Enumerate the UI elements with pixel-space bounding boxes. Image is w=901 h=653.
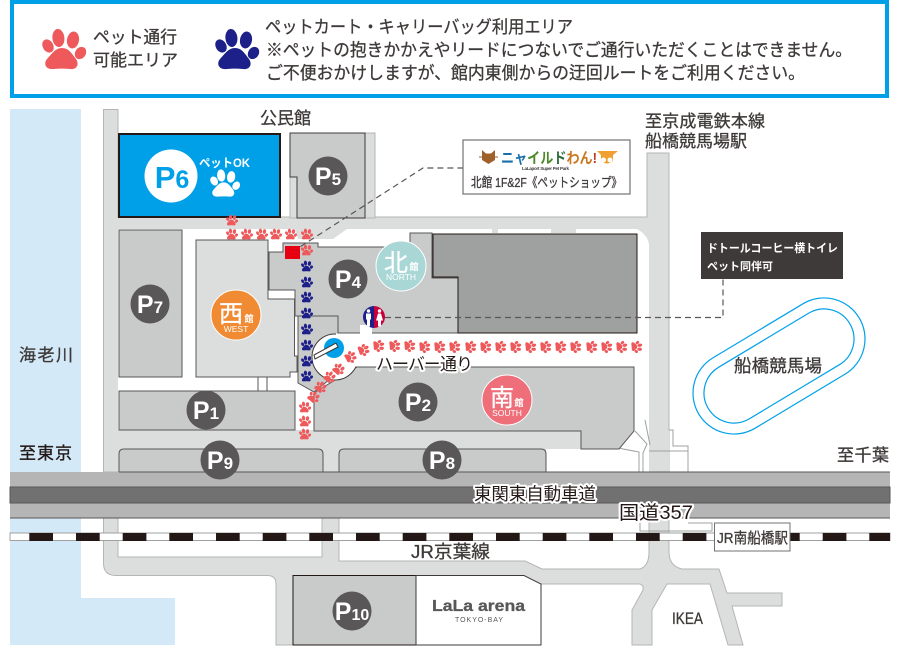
label: community hall: 公民館 — [260, 109, 311, 128]
label: Keisei line — [645, 112, 765, 151]
icon: dog logo — [597, 151, 618, 164]
callout: pet shop — [463, 140, 630, 194]
badge: P4 — [328, 260, 368, 298]
callout second line: ペット同伴可 — [707, 259, 773, 273]
roundabout and harbor street — [312, 325, 649, 380]
label: race course: 船橋競馬場 — [734, 356, 822, 376]
legend panel — [12, 2, 887, 96]
building: lower west block — [298, 316, 338, 392]
building: P8 — [339, 449, 546, 472]
badge: north: 北 — [384, 250, 408, 277]
P6 pet OK mark: ペットOK — [199, 156, 250, 170]
building: P9 — [119, 449, 323, 472]
map base — [10, 109, 782, 645]
badge: P10 — [332, 592, 372, 630]
shop location: 北館 1F&2F《ペットショップ》 — [471, 175, 622, 190]
badge: P8 — [422, 440, 462, 480]
building: dark block — [433, 234, 637, 333]
label: expressway: 東関東自動車道 — [474, 484, 596, 504]
water: river — [10, 109, 175, 645]
road stub and gaps — [295, 229, 669, 472]
badge: south: 館 — [514, 397, 524, 408]
icon: restroom — [363, 306, 385, 328]
label: to Chiba: 至千葉 — [837, 446, 889, 465]
badge: P7: P7 — [137, 291, 163, 319]
label: Ebi river: 海老川 — [19, 346, 73, 365]
logo text: ニャイルドわん! — [501, 150, 597, 167]
badge: south: 南 — [490, 385, 514, 412]
badge: P2: P2 — [405, 389, 431, 417]
station label: JR Minami-Funabashi: JR南船橋駅 — [717, 530, 788, 547]
building: P5 — [290, 133, 365, 218]
label: route 357: 国道357 — [619, 502, 693, 524]
building: LaLa arena — [416, 576, 541, 645]
building: IKEA: IKEA — [672, 609, 704, 628]
badge: north: NORTH — [386, 272, 416, 282]
badge: west: 西 — [219, 301, 243, 328]
callout: Doutor restroom: ドトールコーヒー横トイレ — [707, 241, 838, 255]
badge: P4: P4 — [335, 266, 362, 294]
junction outlines — [618, 420, 712, 531]
railway — [10, 533, 890, 541]
badge: P1: P1 — [193, 397, 219, 425]
legend: pet area: ペット通行 — [93, 28, 177, 47]
legend: cart area and note: ご不便おかけしますが、館内東側からの迂回ルートをご利用ください。 — [266, 63, 805, 83]
icon: red paw — [40, 28, 89, 69]
badge: P2 — [398, 382, 438, 422]
legend: pet area — [93, 28, 178, 70]
building: P1 — [119, 391, 295, 430]
badge: west — [211, 290, 261, 340]
badge: west: 館 — [244, 313, 254, 324]
building: P2 — [314, 367, 634, 449]
badge: north: 館 — [409, 261, 419, 272]
label: JR Keiyo line: JR京葉線 — [411, 542, 490, 562]
station label: JR Minami-Funabashi — [714, 523, 790, 551]
dashed leader: shop — [292, 168, 463, 252]
legend: cart area and note: ペットカート・キャリーバッグ利用エリア — [265, 17, 573, 37]
badge: P9: P9 — [207, 447, 233, 475]
badge: P10: P10 — [335, 598, 369, 626]
building: P7 — [119, 230, 182, 377]
badge: P9 — [200, 440, 240, 480]
connector — [258, 377, 267, 391]
badge: west: WEST — [224, 324, 248, 334]
label: to Tokyo: 至東京 — [19, 444, 72, 463]
badge: south: SOUTH — [492, 408, 522, 418]
building: P6 parking — [119, 134, 280, 217]
red square: shop entrance — [285, 246, 300, 259]
building: LaLa arena: LaLa arena — [432, 598, 525, 615]
badge: P6 — [144, 150, 198, 202]
badge: P6: P6 — [155, 160, 189, 195]
legend: pet area: 可能エリア — [93, 51, 178, 70]
legend: cart area and note — [265, 17, 852, 83]
LaLa arena subtitle: TOKYO-BAY — [455, 617, 503, 624]
expressway — [10, 472, 890, 518]
navy paw route — [300, 260, 314, 381]
roads — [104, 110, 782, 645]
badge: P5: P5 — [315, 163, 341, 191]
P6 pet OK mark — [199, 156, 250, 197]
logo subtitle: LaLaport Super Pet Park — [522, 166, 569, 171]
label: Keisei line: 至京成電鉄本線 — [645, 112, 765, 131]
white ground between roads — [118, 229, 649, 472]
building: P4 — [269, 233, 458, 333]
badge: south — [482, 375, 532, 425]
building: P10 — [293, 576, 416, 645]
dashed leader: toilet — [385, 279, 723, 318]
race track — [678, 283, 880, 449]
badge: P7 — [130, 284, 170, 324]
badge: P5 — [308, 156, 348, 196]
callout: Doutor restroom — [701, 232, 843, 279]
badge: P1 — [186, 390, 226, 430]
badge: north — [376, 241, 426, 291]
red paw route — [225, 214, 643, 439]
label: Keisei line: 船橋競馬場駅 — [645, 132, 747, 151]
legend: cart area and note: ※ペットの抱きかかえやリードにつないでご通行いただくことはできません。 — [266, 40, 852, 60]
icon: navy paw — [213, 28, 262, 69]
icon: cat logo — [479, 150, 498, 164]
building: west — [196, 240, 297, 377]
badge: P8: P8 — [429, 447, 455, 475]
label: harbor street: ハーバー通り — [376, 355, 473, 374]
